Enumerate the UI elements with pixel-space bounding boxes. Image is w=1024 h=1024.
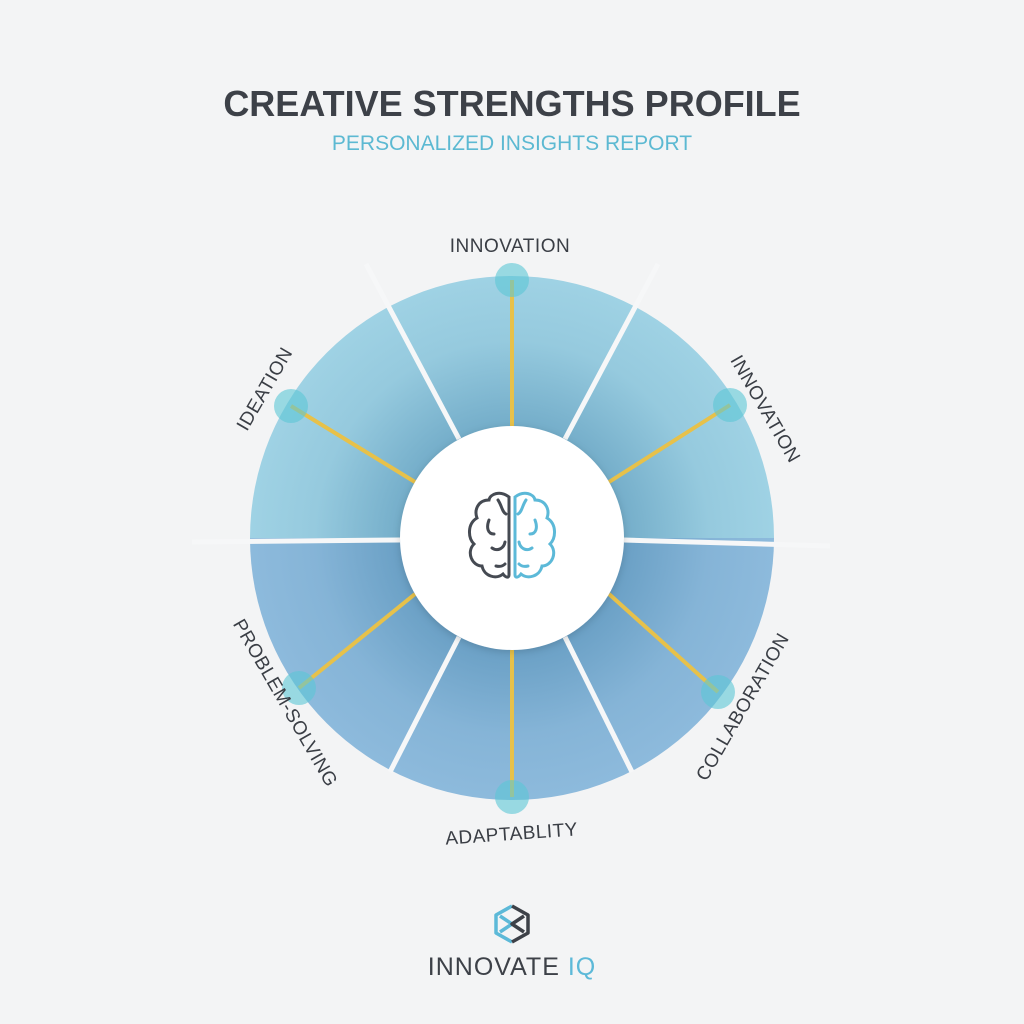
labels: INNOVATION [450, 236, 570, 257]
brand name: INNOVATE IQ [428, 953, 596, 981]
labels: PROBLEM-SOLVING [228, 616, 341, 791]
gold spokes [291, 280, 730, 797]
title: CREATIVE STRENGTHS PROFILE [223, 83, 801, 124]
labels: ADAPTABLITY [445, 819, 579, 850]
labels [228, 236, 804, 850]
labels: INNOVATION [726, 352, 804, 467]
labels: COLLABORATION [692, 630, 794, 785]
node dots [274, 263, 747, 814]
labels: IDEATION [233, 344, 297, 434]
subtitle: PERSONALIZED INSIGHTS REPORT [332, 132, 692, 155]
center circle [400, 426, 624, 650]
icon: logo hexagon [496, 906, 528, 942]
icon: brain [469, 493, 555, 577]
